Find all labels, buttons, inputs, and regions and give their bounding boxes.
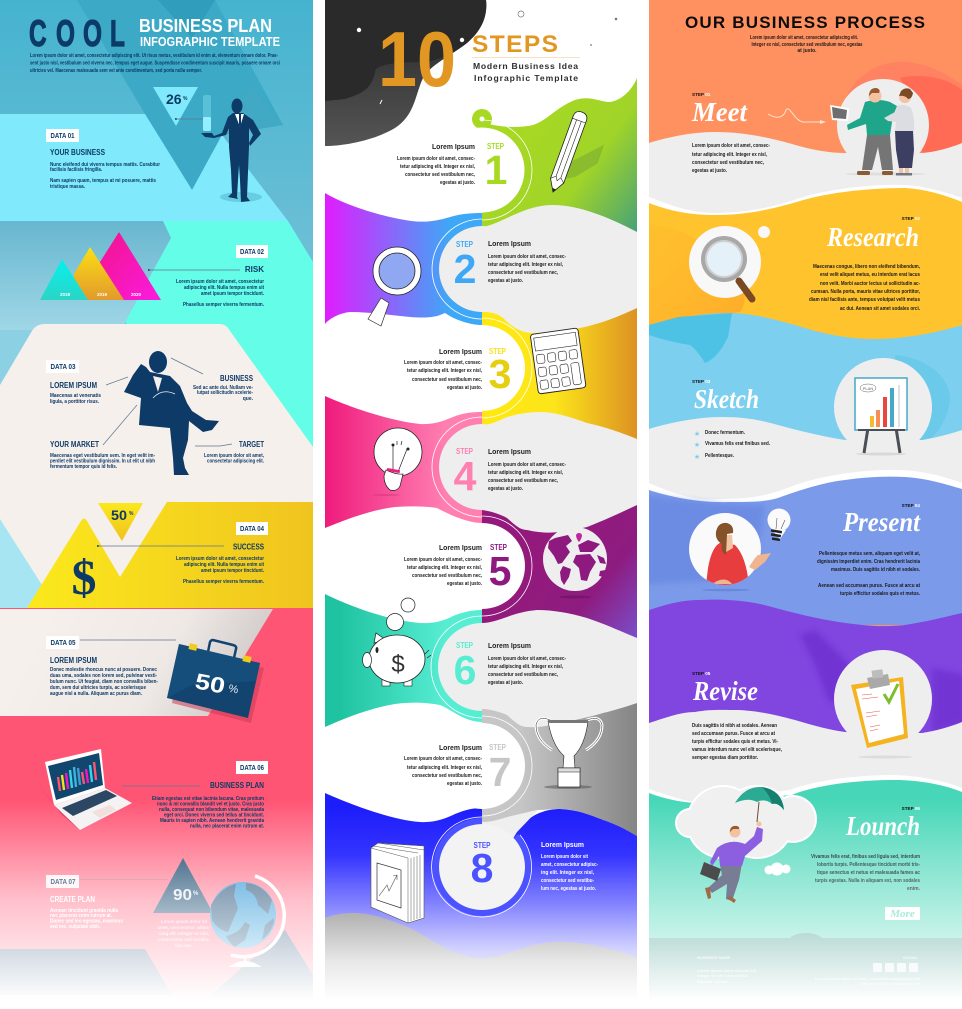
icon: piggy bank: [362, 598, 431, 686]
text: step 8: [541, 840, 598, 892]
button: more: More: [889, 908, 915, 920]
text: business plan section: [122, 781, 265, 830]
step 8 circle: 8: [471, 845, 493, 891]
chart: triangle years: [40, 232, 161, 300]
bullet list: ★: [694, 430, 700, 438]
text: step 02: Research: [826, 222, 919, 252]
text: risk: amet ipsum tempor tincidunt.: [201, 291, 265, 297]
bullet list: Vivamus felis erat finibus sed.: [705, 441, 771, 447]
section 5 band: [649, 600, 962, 735]
label: data 05: [46, 636, 176, 649]
text: step 06: tique senectus et netus et malesuada fames ac: [817, 870, 920, 876]
text: step 6: tetur adipiscing elit. Integer ex nisl,: [488, 664, 564, 670]
text: your business: Nunc eleifend dui viverra tempus mattis. Curabitur: [50, 162, 160, 168]
section 5 grey wave: [649, 650, 962, 820]
text: step 04: Present: [842, 507, 921, 537]
band: light cyan: [0, 114, 288, 221]
chart: triangle years: 2018: [60, 292, 71, 297]
band: turquoise: [125, 221, 313, 450]
text: under triangle: Lorem ipsum dolor sit: [161, 919, 208, 924]
text: step 2: 2: [454, 246, 476, 292]
text: step 02: Maecenas congue, libero non eleifend bibendum,: [813, 264, 921, 270]
band: cream lower: [0, 609, 273, 716]
text: success: SUCCESS: [233, 542, 265, 552]
text: step 7: Lorem Ipsum: [439, 743, 482, 752]
text: step 7: STEP: [489, 743, 507, 752]
text: step 1: egestas at justo.: [440, 180, 476, 186]
text: step 8: Lorem ipsum dolor sit: [541, 854, 588, 860]
icon: laptop: [34, 749, 132, 830]
text: step 3: tetur adipiscing elit. Integer ex nisl,: [407, 368, 483, 374]
icon: briefcase 50 percent: 50: [193, 668, 227, 699]
label: data 06: [236, 761, 268, 774]
text: step 01: egestas at justo.: [692, 168, 728, 174]
label: data 04: [236, 522, 268, 535]
callout: your market: Maecenas eget vestibulum sem. In eget velit im-: [50, 453, 155, 459]
text: step 6: STEP: [456, 641, 474, 650]
callout: lorem ipsum: [50, 377, 128, 405]
step 2 band: [325, 193, 525, 325]
text: business plan section: BUSINESS PLAN: [210, 781, 264, 790]
text: step 4: egestas at justo.: [488, 486, 524, 492]
step 5 band: [439, 505, 637, 638]
callout: your market: fermentum tempor quis id felis.: [50, 464, 118, 470]
icon: cloud: [675, 785, 817, 876]
icon: clipboard: [851, 669, 912, 758]
text: step 6: 6: [454, 647, 476, 693]
text: step 04: Pellentesque metus sem, aliquam eget velit at,: [819, 551, 921, 557]
text: step 6: [454, 641, 566, 693]
text: success: Phasellus semper viverra fermentum.: [183, 579, 265, 585]
panel: cool business plan: [0, 0, 313, 1009]
text: step 8: lum nec, egestas at justo.: [541, 886, 597, 892]
text: business plan section: nulla, consequat non bibendum vitae, malesuada: [159, 807, 264, 813]
text: step 6: consectetur sed vestibulum nec,: [488, 672, 559, 678]
step 1 band: [440, 78, 637, 232]
text: risk: [148, 265, 265, 308]
text: step 2: [454, 239, 566, 292]
subtitle text: [750, 35, 863, 54]
text: success: adipiscing elit. Nulla tempus enim sit: [184, 562, 264, 568]
text: step 6: Lorem ipsum dolor sit amet, consec-: [488, 656, 566, 662]
stat: 50 percent triangle: [98, 503, 143, 541]
panel: our business process: [645, 0, 962, 1009]
text: step 05: [692, 671, 783, 761]
callout: your market: [50, 405, 155, 470]
text: your business: YOUR BUSINESS: [50, 148, 106, 157]
text: step 4: Lorem ipsum dolor sit amet, consec-: [488, 462, 566, 468]
step 8 blue band: [325, 793, 637, 1000]
text: step 1: tetur adipiscing elit. Integer ex nisl,: [400, 164, 476, 170]
subtitle text: Integer ex nisl, consectetur sed vestibulum nec, egestas: [752, 42, 863, 48]
text: step 3: STEP: [489, 347, 507, 356]
bullet list: ★: [694, 441, 700, 449]
icon: woman with idea bulb: [689, 508, 790, 591]
text: step 4: STEP: [456, 447, 474, 456]
text: step 3: consectetur sed vestibulum nec,: [412, 377, 483, 383]
icon: world globe: [543, 527, 607, 598]
intro paragraph: Lorem ipsum dolor sit amet, consectetur adipiscing elit. Ut risus metus, vestibulum id enim at, elementum ornare dolor. Prae-: [30, 53, 278, 59]
step 8 circle: STEP: [474, 841, 491, 850]
callout: target: consectetur adipiscing elit.: [207, 458, 265, 464]
text: step 7: tetur adipiscing elit. Integer ex nisl,: [407, 765, 483, 771]
text: under triangle: [158, 919, 211, 948]
panel: 10 steps: [325, 0, 637, 1000]
background blob: dark: [325, 0, 617, 146]
text: step 02: cumsan. Nulla porta, mauris vitae ultrices porttitor,: [811, 289, 921, 295]
intro paragraph: ultricies vel. Maecenas malesuada sem vel ante condimentum, sed porta nulla semper.: [30, 68, 203, 74]
title: infographic template: INFOGRAPHIC TEMPLATE: [140, 34, 280, 49]
label: data 01: DATA 01: [50, 133, 75, 140]
text: step 05: turpis efficitur sodales quis et metus. Vi-: [692, 739, 778, 745]
title: cool: COOL: [29, 12, 125, 54]
text: step 5: Lorem ipsum dolor sit amet, consec-: [404, 557, 482, 563]
bullet list: [694, 430, 771, 461]
icon: piggy bank: $: [391, 651, 405, 678]
intro paragraph: sent justo nisl, vestibulum sed viverra nec, tempus eget augue. Suspendisse condimentum suscipit mauris, posuere ornare orci: [30, 60, 281, 66]
label: data 02: [236, 245, 268, 258]
subtitle text: Lorem ipsum dolor sit amet, consectetur adipiscing elit.: [750, 35, 858, 41]
section 2 band: [649, 185, 962, 345]
text: step 7: egestas at justo.: [447, 781, 483, 787]
text: lorem ipsum section 5: dum, sem dui ultricies turpis, ac scelerisque: [50, 685, 146, 691]
text: step 01: consectetur sed vestibulum nec,: [692, 160, 765, 166]
section 1 grey wave: [649, 79, 962, 235]
footer: Egestas at justo: [697, 979, 728, 984]
stat: 90 percent triangle: 90: [173, 887, 192, 904]
text: step 8: ing elit. Integer ex nisl,: [541, 870, 595, 876]
text: step 05: STEP 05: [692, 671, 711, 676]
text: step 02: erat velit aliquet metus, eu interdum erat lacus: [820, 272, 920, 278]
text: step 5: egestas at justo.: [447, 581, 483, 587]
text: step 5: tetur adipiscing elit. Integer ex nisl,: [407, 565, 483, 571]
text: step 04: dignissim imperdiet enim. Cras hendrerit lacinia: [817, 559, 920, 565]
stat: 26 percent: %: [183, 96, 188, 102]
stat: 26 percent: [153, 87, 203, 126]
icon: presentation board: PLAN: [863, 386, 873, 391]
text: your business: tristique massa.: [50, 184, 86, 190]
title: 10: 10: [378, 15, 456, 103]
text: step 2: Lorem ipsum dolor sit amet, consec-: [488, 254, 566, 260]
icon: desk globe: [210, 876, 284, 966]
icon: flying man with umbrella: [700, 787, 784, 903]
bullet list: Pellentesque.: [705, 453, 735, 459]
text: step 06: [811, 806, 921, 892]
label: data 03: [46, 360, 79, 373]
text: step 04: STEP 04: [902, 503, 920, 508]
text: step 4: consectetur sed vestibulum nec,: [488, 478, 559, 484]
text: your business: facilisis facilisis fringilla.: [50, 167, 103, 173]
text: step 2: egestas at justo.: [488, 278, 524, 284]
icon: trophy: [536, 718, 602, 789]
section 3 grey wave: [649, 358, 962, 520]
stat: 50 percent triangle: 50: [111, 507, 127, 523]
text: lorem ipsum section 5: Donec molestie rhoncus nunc at posuere. Donec: [50, 667, 157, 673]
text: step 04: maximus. Duis sagittis id nibh et sodales.: [831, 567, 921, 573]
subtitle: [473, 61, 578, 83]
text: step 06: Lounch: [845, 811, 920, 841]
subtitle: Infographic Template: [474, 73, 578, 83]
text: create plan: nec placerat enim rutrum at.: [50, 913, 113, 919]
text: step 3: Lorem Ipsum: [439, 347, 482, 356]
label: data 07: DATA 07: [50, 879, 76, 886]
step 7 band: [439, 703, 637, 836]
text: business plan section: nulla, nec placerat enim rutrum at.: [190, 824, 265, 830]
text: under triangle: lum nec.: [175, 943, 193, 948]
text: step 06: turpis egestas. Nulla in aliquam est, non sodales: [815, 878, 920, 884]
text: step 3: egestas at justo.: [447, 385, 483, 391]
text: create plan: sed nec, vulputate nibh.: [50, 924, 101, 930]
label: data 01: [46, 129, 79, 142]
text: your business: [50, 148, 160, 190]
text: step 06: Vivamus felis erat, finibus sed ligula sed, interdum: [811, 854, 920, 860]
footer: Lorem ipsum dolor sit amet elit: [697, 968, 757, 973]
arrow: squiggle: [768, 109, 826, 124]
text: under triangle: cing elit. Integer ex nisl,: [159, 931, 209, 936]
text: step 7: Lorem ipsum dolor sit amet, consec-: [404, 756, 482, 762]
chart: triangle years: 2019: [97, 292, 108, 297]
text: step 02: ac dui. Aenean sit amet sodales orci.: [840, 306, 921, 312]
text: lorem ipsum section 5: bulum nunc. Ut feugiat, diam non convallis biben-: [50, 679, 158, 685]
text: step 5: 5: [489, 548, 511, 594]
label: data 05: DATA 05: [50, 640, 76, 647]
footer: SOCIAL: [903, 955, 919, 960]
text: step 03: Sketch: [694, 384, 759, 414]
text: success: amet ipsum tempor tincidunt.: [201, 568, 265, 574]
text: success: [97, 542, 265, 585]
icon: two people with tablet: [830, 88, 925, 176]
text: step 3: [404, 347, 511, 397]
text: your business: Nam sapien quam, tempus at mi posuere, mattis: [50, 178, 156, 184]
callout: business: Sed ac ante dui. Nullam ve-: [193, 385, 253, 391]
text: step 5: [404, 543, 511, 594]
text: step 7: [404, 743, 511, 795]
callout: lorem ipsum: ligula, a porttitor risus.: [50, 399, 100, 405]
callout: lorem ipsum: Maecenas at venenatis: [50, 393, 101, 399]
text: step 2: consectetur sed vestibulum nec,: [488, 270, 559, 276]
band: yellow: [27, 502, 313, 608]
text: step 06: enim.: [907, 886, 921, 892]
text: step 05: vamus interdum nunc vel elit scelerisque,: [692, 747, 783, 753]
text: step 1: Lorem Ipsum: [432, 142, 475, 151]
text: step 3: Lorem ipsum dolor sit amet, consec-: [404, 360, 482, 366]
icon: pencil: [546, 110, 612, 203]
label: data 04: DATA 04: [240, 526, 264, 533]
label: data 06: DATA 06: [240, 765, 264, 772]
text: step 6: egestas at justo.: [488, 680, 524, 686]
band: cream hexagon: [0, 324, 313, 608]
text: step 2: Lorem Ipsum: [488, 239, 531, 248]
text: step 8: consectetur sed vestibu-: [541, 878, 594, 884]
text: business plan section: nunc & mi convallis blandit vel et justo. Cras justo: [157, 802, 264, 808]
text: step 04: Aenean sed accumsan purus. Fusce at arcu at: [818, 583, 920, 589]
footer: Lorem ipsum dolor sit amet, consectetur adipiscing elit: [815, 976, 921, 981]
callout: target: Lorem ipsum dolor sit amet,: [204, 453, 265, 459]
text: step 1: [397, 142, 507, 193]
text: risk: Lorem ipsum dolor sit amet, consectetur: [176, 279, 264, 285]
text: step 4: tetur adipiscing elit. Integer ex nisl,: [488, 470, 564, 476]
text: step 4: 4: [454, 453, 477, 499]
text: step 01: [691, 92, 770, 174]
text: step 01: Lorem ipsum dolor sit amet, consec-: [692, 143, 770, 149]
text: step 05: sed accumsan purus. Fusce at arcu at: [692, 731, 775, 737]
intro paragraph: [30, 53, 281, 74]
text: step 05: Duis sagittis id nibh at sodales. Aenean: [692, 723, 777, 729]
icon: dollar sign: $: [72, 549, 96, 605]
text: step 5: consectetur sed vestibulum nec,: [412, 573, 483, 579]
title: steps: STEPS: [472, 31, 558, 58]
text: step 1: consectetur sed vestibulum nec,: [405, 172, 476, 178]
title: business plan: BUSINESS PLAN: [139, 16, 272, 36]
text: step 5: STEP: [490, 543, 508, 552]
text: risk: adipiscing elit. Nulla tempus enim sit: [184, 285, 264, 291]
text: lorem ipsum section 5: augue nisl a nulla. Aliquam ac purus diam.: [50, 691, 143, 697]
section 3 band: [649, 313, 962, 442]
callout: business: [171, 358, 254, 402]
chart: triangle years: 2020: [131, 292, 142, 297]
stat: 90 percent triangle: %: [193, 891, 199, 897]
callout: business: BUSINESS: [220, 374, 254, 383]
text: create plan: Aenean tincidunt gravida nulla: [50, 908, 118, 914]
callout: target: TARGET: [239, 440, 264, 449]
button: more: [885, 907, 920, 920]
text: step 6: Lorem Ipsum: [488, 641, 531, 650]
fade overlay: [0, 716, 313, 1009]
text: step 04: [817, 503, 921, 597]
icon: seated businessman on phone: [124, 351, 219, 475]
text: step 04: turpis efficitur sodales quis et metus.: [840, 591, 921, 597]
text: step 01: STEP 01: [692, 92, 711, 97]
callout: your market: YOUR MARKET: [50, 440, 99, 449]
text: step 8: amet, consectetur adipisc-: [541, 862, 598, 868]
callout: business: lutpat sollicitudin scelerie-: [197, 390, 253, 396]
text: step 1: STEP: [487, 142, 505, 151]
text: step 7: consectetur sed vestibulum nec,: [412, 773, 483, 779]
icon: standing businessman with glass: [201, 95, 262, 202]
text: step 2: tetur adipiscing elit. Integer ex nisl,: [488, 262, 564, 268]
text: step 5: Lorem Ipsum: [439, 543, 482, 552]
text: create plan: [50, 895, 123, 930]
step 4 band: [325, 396, 525, 528]
text: step 01: Meet: [691, 97, 748, 127]
text: step 8: Lorem Ipsum: [541, 840, 584, 849]
text: step 06: STEP 06: [902, 806, 920, 811]
callout: target: [195, 440, 265, 464]
text: step 06: lobortis turpis. Pellentesque tincidunt morbi tris-: [817, 862, 920, 868]
bottom grey wave: [325, 913, 637, 1000]
icon: magnifier on white circle: [689, 226, 770, 299]
callout: business: que.: [243, 396, 254, 402]
text: step 7: 7: [489, 749, 511, 795]
text: step 02: non velit. Morbi auctor lectus ut sollicitudin ac-: [820, 281, 920, 287]
footer: [697, 955, 921, 986]
text: success: Lorem ipsum dolor sit amet, consectetur: [176, 556, 264, 562]
background blob: peach and red wash: [845, 62, 962, 153]
text: step 2: STEP: [456, 240, 474, 249]
stat: 50 percent triangle: %: [129, 511, 134, 517]
step 8 circle: [432, 817, 532, 917]
text: create plan: CREATE PLAN: [50, 895, 95, 904]
text: lorem ipsum section 5: [50, 656, 158, 697]
text: step 05: Revise: [692, 676, 758, 706]
footer: BUSINESS NAME: [697, 955, 731, 960]
text: business plan section: Mauris in sapien nibh. Aenean hendrerit gravida: [160, 818, 264, 824]
subtitle: Modern Business Idea: [473, 61, 578, 71]
text: step 02: diam nisl facilisis ante, tempus volutpat velit metus: [809, 297, 920, 303]
callout: lorem ipsum: LOREM IPSUM: [50, 381, 97, 390]
text: lorem ipsum section 5: duas uma, sodales non lorem sed, pulvinar vesti-: [50, 673, 157, 679]
label: data 07: [46, 875, 168, 888]
bullet list: Donec fermentum.: [705, 430, 746, 436]
text: step 4: Lorem Ipsum: [488, 447, 531, 456]
text: lorem ipsum section 5: LOREM IPSUM: [50, 656, 97, 665]
step 3 band: [439, 308, 637, 439]
title: OUR BUSINESS PROCESS: [685, 13, 925, 32]
text: step 4: [454, 447, 566, 499]
section 4 band: [645, 470, 962, 625]
text: step 02: [809, 216, 921, 312]
footer: Integer ex nisl consectetur: [697, 973, 748, 978]
label: data 03: DATA 03: [50, 364, 76, 371]
text: business plan section: Etiam egestas est vitae lacinia lacuna. Cras pretium: [152, 796, 264, 802]
bullet list: ★: [694, 453, 700, 461]
footer: Integer ex nisl, consectetur sed: [860, 981, 921, 986]
section 6 band: [649, 775, 962, 1009]
icon: calculator: [530, 328, 586, 394]
text: step 1: Lorem ipsum dolor sit amet, consec-: [397, 156, 475, 162]
icon: briefcase 50 percent: %: [227, 683, 240, 696]
icon: book: [371, 843, 424, 923]
text: step 3: 3: [489, 351, 511, 397]
icon: magnifier: [368, 247, 421, 326]
icon: briefcase 50 percent: [167, 640, 264, 723]
text: risk: Phasellus semper viverra fermentum.: [183, 302, 265, 308]
text: business plan section: eget orci. Donec viverra sed tellus at tincidunt.: [164, 812, 265, 818]
text: step 02: STEP 02: [902, 216, 920, 221]
text: create plan: Donec sed leo egestas, maximus: [50, 918, 123, 924]
step 6 band: [325, 594, 526, 727]
text: step 1: 1: [485, 147, 507, 193]
subtitle text: at justo.: [797, 48, 817, 54]
text: step 05: semper egestas diam porttitor.: [692, 755, 759, 761]
text: under triangle: amet, consectetur adipis-: [158, 925, 211, 930]
text: step 03: STEP 03: [692, 379, 711, 384]
stat: 90 percent triangle: [153, 858, 213, 913]
text: step 01: tetur adipiscing elit. Integer ex nisl,: [692, 152, 768, 158]
callout: your market: perdiet elit vestibulum dignissim. In ut elit ut nibh: [50, 458, 155, 464]
stat: 26 percent: 26: [166, 91, 182, 107]
icon: presentation board: [855, 378, 907, 456]
text: under triangle: consectetur sed vestibu-: [158, 937, 210, 942]
text: risk: RISK: [245, 265, 264, 274]
label: data 02: DATA 02: [240, 249, 264, 256]
icon: light bulb: [372, 428, 422, 496]
